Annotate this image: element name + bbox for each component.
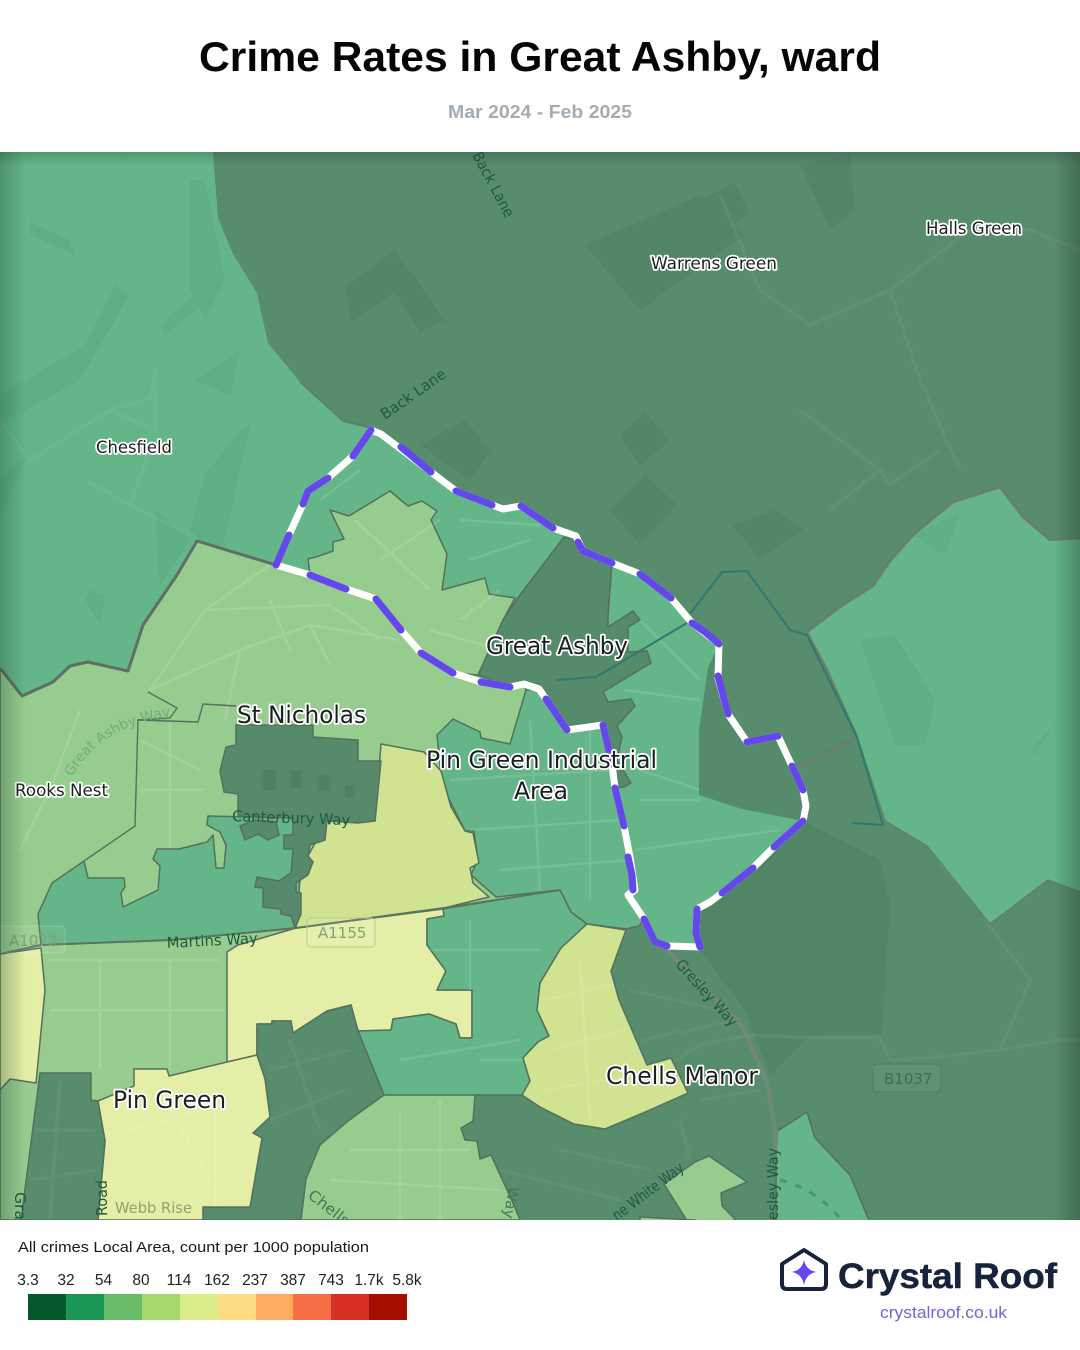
road names: Back Lane <box>377 365 450 423</box>
legend scale values: 3.3 <box>17 1272 39 1289</box>
road shield A1155 <box>307 918 375 947</box>
subtitle: date range: Mar 2024 - Feb 2025 <box>448 102 632 122</box>
region: Chesfield mid-green <box>0 152 371 696</box>
region: Great Ashby ward interior <box>276 430 806 947</box>
place labels: Rooks Nest <box>15 781 108 801</box>
region: mid-green south <box>358 890 587 1095</box>
road names <box>15 152 810 1270</box>
road shield B1037: B1037 <box>884 1070 932 1088</box>
region: south light patch <box>640 1156 747 1227</box>
region: Pin Green pale <box>98 1055 270 1220</box>
logo wordmark: Crystal Roof <box>838 1257 1057 1296</box>
region: mid-green Canterbury area <box>38 816 300 945</box>
legend scale values: 5.8k <box>392 1272 422 1289</box>
title: Crime Rates in Great Ashby, ward <box>199 33 881 80</box>
road names: Back Lane <box>468 148 518 220</box>
place labels: Chesfield <box>96 438 172 458</box>
region: south-east mid-green <box>776 1112 871 1225</box>
region: east mid-green <box>807 487 1080 924</box>
road names: esley Way <box>764 1148 782 1220</box>
road shield A1072: A1072 <box>9 932 57 950</box>
road names: Gra <box>11 1192 29 1220</box>
legend colour bar <box>28 1294 407 1320</box>
place labels: Great Ashby <box>486 632 628 660</box>
region: western dark strip <box>21 1073 105 1220</box>
road shield B1037 <box>873 1064 941 1092</box>
road names: Chells <box>305 1186 354 1230</box>
boundaries: district outlines <box>0 382 1080 924</box>
legend scale values: 32 <box>57 1272 75 1289</box>
road: Gresley Way <box>667 950 776 1156</box>
logo URL: crystalroof.co.uk <box>880 1303 1008 1322</box>
legend scale values: 162 <box>204 1272 230 1289</box>
place labels: Halls Green <box>926 219 1022 239</box>
region boundaries: St Nicholas sub-areas <box>84 692 236 861</box>
region: ward light-green lobe <box>308 491 515 675</box>
icon: house with star <box>782 1250 826 1289</box>
region: St Nicholas light green <box>0 541 560 1220</box>
road: Martins Way line <box>0 890 560 954</box>
place labels: Pin Green Industrial <box>426 746 657 774</box>
road names: Road <box>93 1180 111 1216</box>
region: Pin Green Industrial Area <box>437 689 644 929</box>
region: pale far-left strip <box>0 948 45 1090</box>
legend <box>17 1240 422 1320</box>
legend scale values: 387 <box>280 1272 306 1289</box>
place labels: Chells Manor <box>606 1062 758 1090</box>
road names: Gresley Way <box>672 956 742 1030</box>
road shield A1072 <box>0 926 65 953</box>
region: Canterbury dark block <box>220 725 381 928</box>
road names: Canterbury Way <box>232 807 351 829</box>
road shield A1155: A1155 <box>318 924 366 942</box>
road names: Great Ashby Way <box>65 709 170 774</box>
place labels: Area <box>514 777 568 805</box>
legend scale values: 1.7k <box>354 1272 384 1289</box>
place labels: Pin Green <box>113 1086 226 1114</box>
region: ward dark core with tendrils <box>478 537 651 788</box>
ward boundary: white base with purple dashes <box>276 430 806 947</box>
region: central dark block <box>203 1005 384 1220</box>
region: Chells Manor pale <box>522 924 688 1129</box>
logo: Crystal Roof <box>782 1250 1057 1322</box>
legend scale values <box>17 1272 422 1289</box>
place labels: Warrens Green <box>651 254 777 274</box>
map edge vignette <box>0 152 1080 1220</box>
road names: Webb Rise <box>115 1199 192 1217</box>
place labels: St Nicholas <box>237 701 366 729</box>
road names: ne White Way <box>609 1159 687 1224</box>
road names: Way <box>499 1185 523 1220</box>
region: ward eastern dark block <box>699 644 806 821</box>
region: pale centre south of Martins Way <box>227 909 472 1062</box>
legend scale values: 237 <box>242 1272 268 1289</box>
legend scale values: 114 <box>167 1272 192 1289</box>
place labels <box>15 219 1022 1114</box>
region: pale yellow-green north of Martins Way <box>296 744 489 928</box>
legend title: All crimes Local Area, count per 1000 population <box>18 1240 369 1256</box>
legend scale values: 743 <box>318 1272 344 1289</box>
road names: Martins Way <box>166 929 258 952</box>
river <box>556 571 883 825</box>
legend scale values: 54 <box>95 1272 112 1289</box>
legend scale values: 80 <box>132 1272 150 1289</box>
